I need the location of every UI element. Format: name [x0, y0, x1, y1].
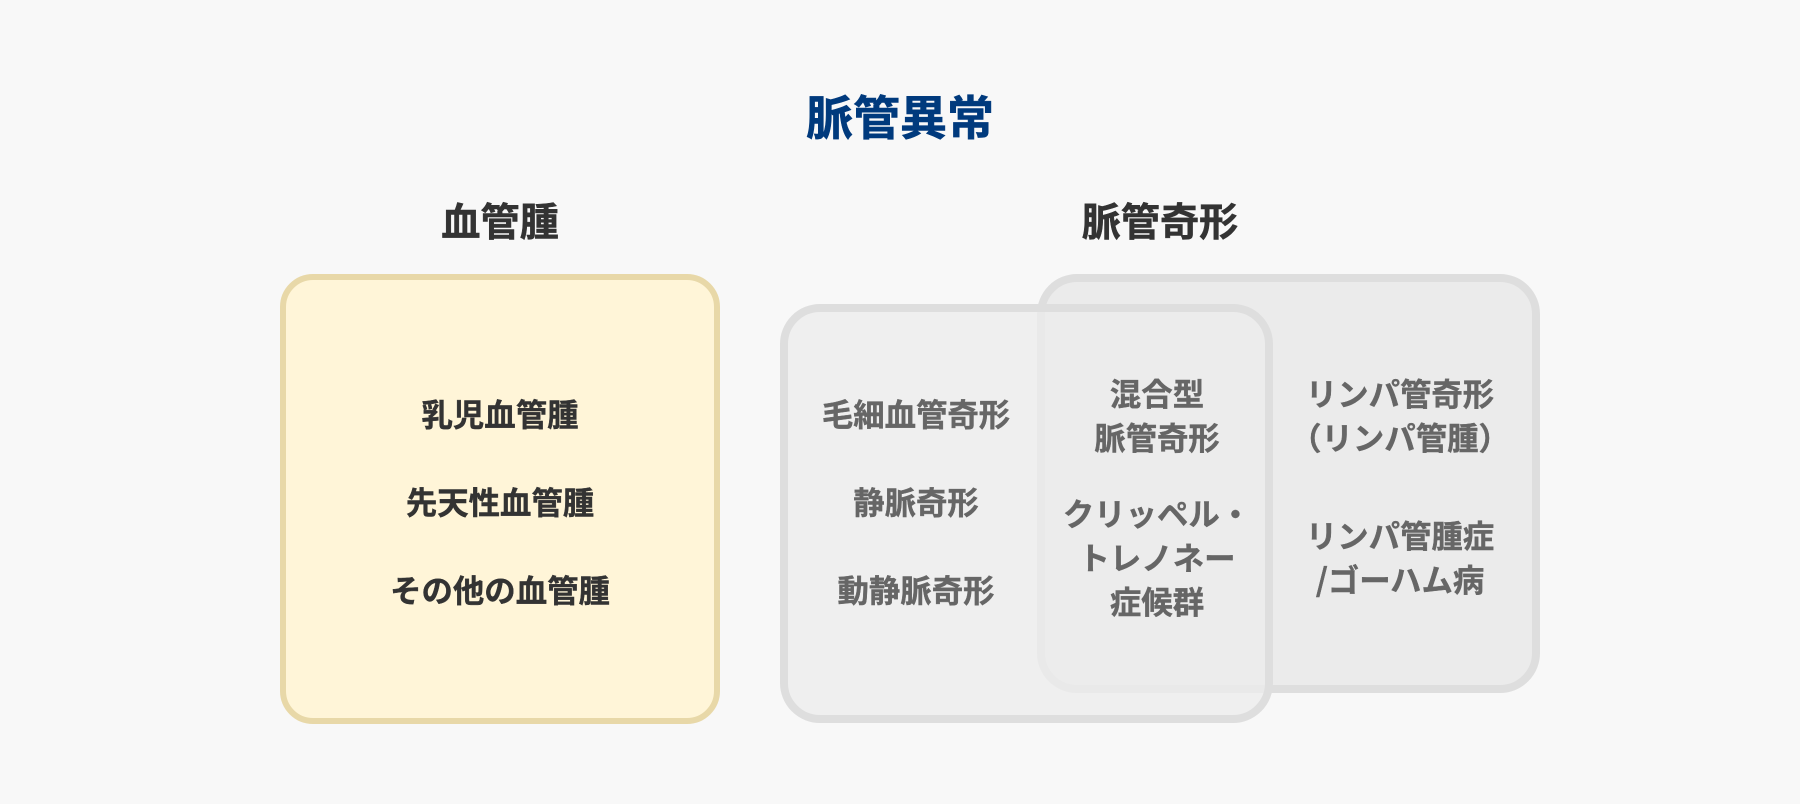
- item: mixed vascular malformation: 脈管奇形: [1094, 414, 1220, 460]
- item: Klippel-Trenaunay syndrome: 症候群: [1110, 578, 1204, 624]
- heading: hemangioma: 血管腫: [441, 192, 559, 248]
- item: venous malformation: 静脈奇形: [853, 479, 979, 524]
- item: other hemangioma: その他の血管腫: [390, 567, 610, 612]
- item: arteriovenous malformation: 動静脈奇形: [838, 567, 994, 612]
- panel: hemangioma: [283, 277, 717, 721]
- right column list: [1290, 370, 1510, 602]
- middle column list: [1063, 370, 1251, 624]
- item: congenital hemangioma: 先天性血管腫: [406, 479, 594, 524]
- title: 脈管異常: [806, 80, 994, 149]
- panel: lymphatic malformation region: [1041, 278, 1536, 689]
- left column list: [822, 391, 1010, 612]
- item: capillary malformation: 毛細血管奇形: [822, 391, 1010, 436]
- item: Klippel-Trenaunay syndrome: トレノネー: [1079, 534, 1235, 580]
- item: lymphangiomatosis / Gorham disease: /ゴーハム病: [1316, 556, 1484, 602]
- item: lymphatic malformation: （リンパ管腫）: [1290, 414, 1510, 460]
- item: mixed vascular malformation: 混合型: [1110, 370, 1204, 416]
- item: infantile hemangioma: 乳児血管腫: [422, 391, 578, 436]
- item: lymphatic malformation: リンパ管奇形: [1306, 370, 1494, 416]
- item: Klippel-Trenaunay syndrome: クリッペル・: [1063, 490, 1251, 536]
- item: lymphangiomatosis / Gorham disease: リンパ管腫症: [1306, 512, 1494, 558]
- panel: vascular malformation region: [784, 308, 1269, 719]
- heading: vascular malformation: 脈管奇形: [1082, 192, 1238, 248]
- hemangioma list: [390, 391, 610, 612]
